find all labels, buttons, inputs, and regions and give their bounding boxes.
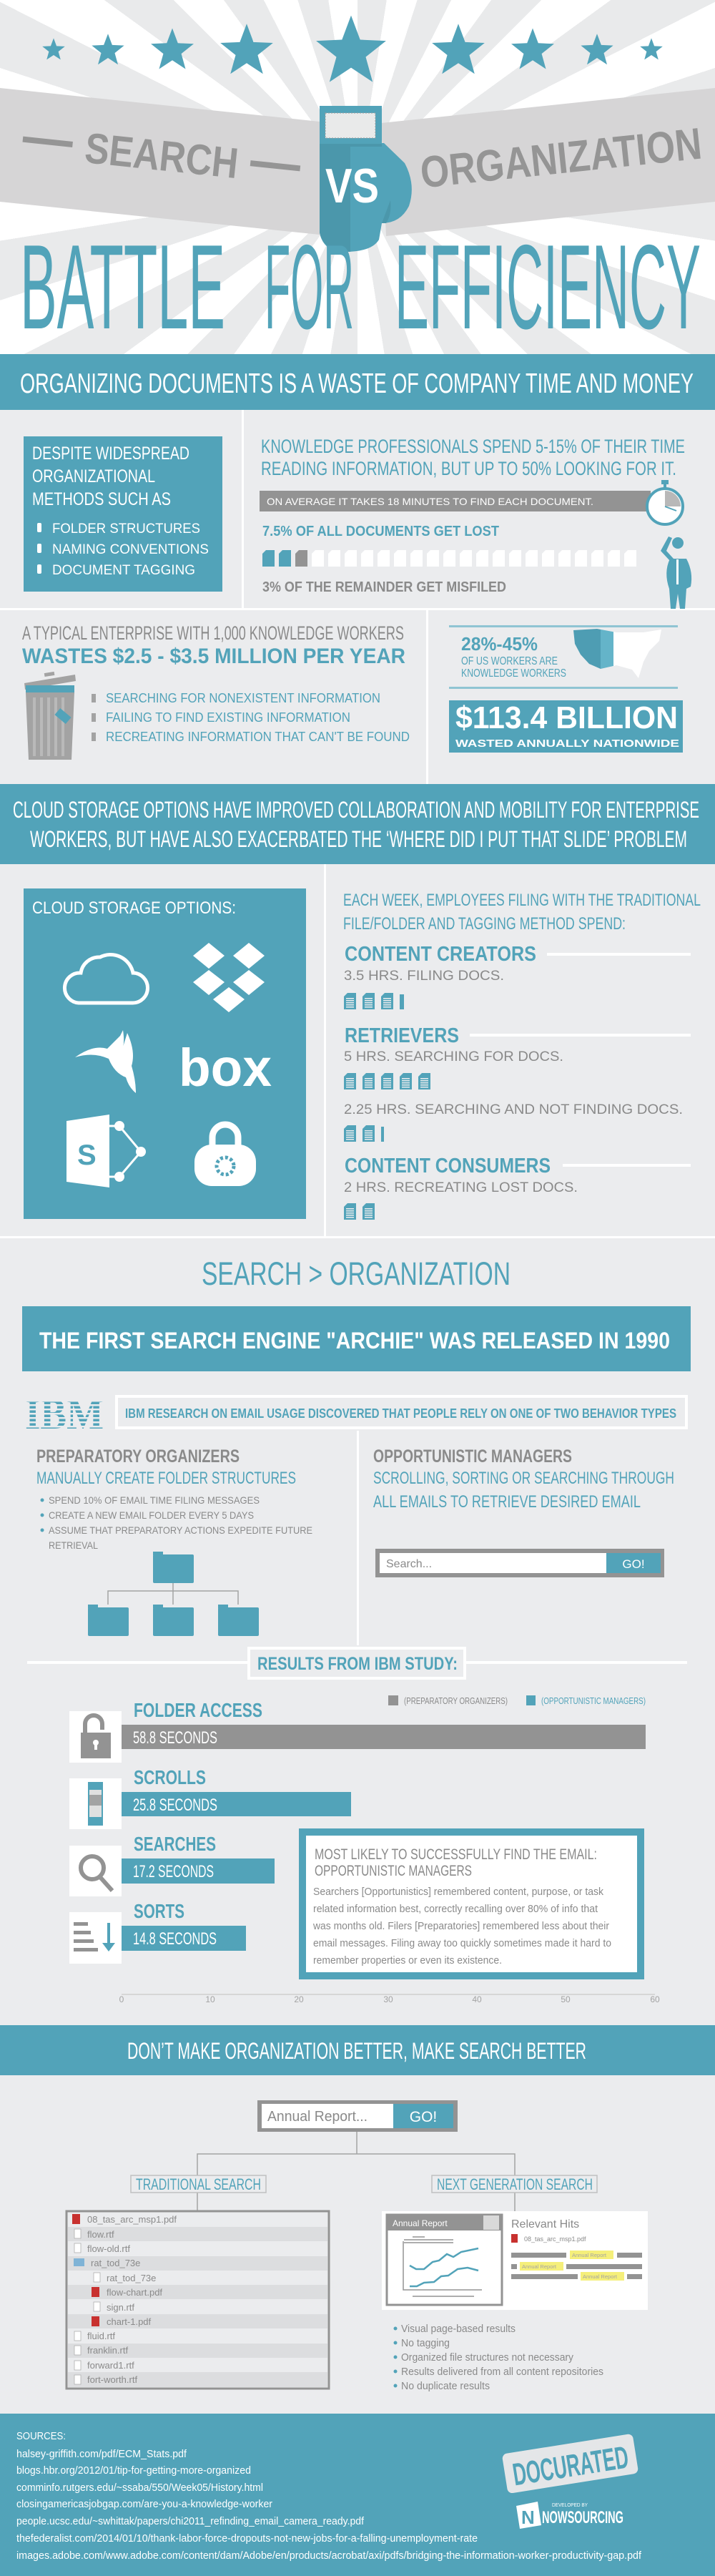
chart axis: 50	[561, 1994, 571, 2004]
icon: box logo: box	[179, 1038, 272, 1097]
callout: most likely to find email: email messages. Filing away too quickly sometimes made it hard to	[313, 1937, 611, 1949]
file list: traditional search results: forward1.rtf	[87, 2360, 134, 2371]
stat bar: 18 minutes	[260, 491, 651, 511]
column: preparatory organizers: PREPARATORY ORGANIZERS	[36, 1446, 240, 1466]
bar: searches: 17.2 SECONDS	[133, 1862, 214, 1881]
icon: trash can	[24, 672, 76, 760]
file list: traditional search results: flow.rtf	[87, 2229, 114, 2240]
column: preparatory organizers: CREATE A NEW EMAIL FOLDER EVERY 5 DAYS	[49, 1509, 254, 1521]
text block: knowledge professionals	[261, 436, 685, 479]
icon: lock	[194, 1125, 256, 1186]
bar: scrolls: SCROLLS	[134, 1766, 206, 1788]
legend	[388, 1695, 646, 1706]
bar: searches: SEARCHES	[134, 1833, 216, 1855]
legend: (PREPARATORY ORGANIZERS)	[404, 1695, 508, 1706]
chart axis: 10	[205, 1994, 215, 2004]
list: next generation benefits: Visual page-based results	[401, 2323, 516, 2335]
stat: knowledge workers with map: 28%-45%	[461, 633, 538, 655]
bar: scrolls	[69, 1766, 351, 1829]
banner: make search better	[0, 2025, 715, 2075]
heading: search > organization: SEARCH > ORGANIZATION	[202, 1255, 511, 1292]
panel: organizational methods: METHODS SUCH AS	[32, 489, 171, 509]
stat: content creators	[344, 943, 691, 1009]
panel: next generation results: 08_tas_arc_msp1.pdf	[524, 2235, 586, 2243]
panel: next generation results: Annual Report	[583, 2273, 618, 2280]
logo: nowsourcing	[516, 2502, 623, 2529]
search box: Search...	[386, 1558, 432, 1570]
chart axis: 0	[119, 1994, 124, 2004]
label: traditional search: TRADITIONAL SEARCH	[136, 2175, 261, 2193]
panel: next generation results: Annual Report	[522, 2263, 557, 2270]
column: preparatory organizers: MANUALLY CREATE FOLDER STRUCTURES	[36, 1469, 296, 1488]
banner: archie	[22, 1306, 691, 1371]
heading: SEARCH: SEARCH	[83, 124, 240, 187]
legend: (OPPORTUNISTIC MANAGERS)	[541, 1695, 646, 1706]
column: preparatory organizers: SPEND 10% OF EMAIL TIME FILING MESSAGES	[49, 1494, 260, 1506]
logo: docurated stamp	[502, 2434, 638, 2494]
search box: annual report	[257, 2100, 458, 2132]
file list: traditional search results: fort-worth.rtf	[87, 2374, 137, 2385]
icon: sharepoint: S	[77, 1140, 97, 1171]
list: next generation benefits	[393, 2323, 603, 2392]
file list: traditional search results	[66, 2211, 329, 2389]
stat: knowledge workers with map	[449, 625, 678, 689]
callout: most likely to find email: OPPORTUNISTIC MANAGERS	[315, 1863, 472, 1879]
sources list: thefederalist.com/2014/01/10/thank-labor-force-dropouts-not-new-jobs-for-a-falling-unemployment-rate	[16, 2532, 478, 2545]
heading: results from IBM study	[27, 1648, 687, 1678]
stat: knowledge workers with map: KNOWLEDGE WORKERS	[461, 667, 566, 680]
bar: sorts	[69, 1900, 246, 1964]
list: next generation benefits: No duplicate results	[401, 2380, 490, 2392]
callout: most likely to find email: was months old. Filers [Preparatories] remembered less about their	[312, 1920, 609, 1932]
list: wasted time causes: SEARCHING FOR NONEXISTENT INFORMATION	[106, 691, 380, 705]
search box: annual report: GO!	[410, 2109, 437, 2125]
panel: cloud storage options: CLOUD STORAGE OPTIONS:	[32, 898, 236, 918]
logo: docurated stamp: DOCURATED	[511, 2439, 631, 2492]
chart axis: 40	[472, 1994, 482, 2004]
banner: organizing documents	[0, 354, 715, 410]
stat: content consumers: CONTENT CONSUMERS	[345, 1155, 551, 1177]
bar: folder access: 58.8 SECONDS	[133, 1728, 217, 1748]
list: next generation benefits: Organized file structures not necessary	[401, 2351, 573, 2364]
sources list: blogs.hbr.org/2012/01/tip-for-getting-more-organized	[16, 2464, 251, 2477]
stat: retrievers: RETRIEVERS	[345, 1024, 459, 1047]
panel: next generation results	[382, 2211, 648, 2310]
callout: most likely to find email: related information best, correctly recalling over 80% of info that	[313, 1903, 598, 1915]
sources list: people.ucsc.edu/~swhittak/papers/chi2011_refinding_email_camera_ready.pdf	[16, 2515, 365, 2527]
text block: typical enterprise	[22, 622, 405, 668]
sources list: SOURCES:	[16, 2430, 66, 2442]
file list: traditional search results: franklin.rtf	[87, 2345, 128, 2356]
panel: organizational methods: NAMING CONVENTIONS	[52, 542, 209, 557]
file list: traditional search results: rat_tod_73e	[91, 2258, 140, 2268]
text: 3% misfiled: 3% OF THE REMAINDER GET MISFILED	[262, 579, 506, 595]
panel: organizational methods: FOLDER STRUCTURES	[52, 521, 200, 537]
stat: content consumers	[344, 1155, 691, 1220]
stat: content consumers: 2 HRS. RECREATING LOST DOCS.	[344, 1180, 578, 1195]
panel: cloud storage options	[24, 888, 306, 1219]
callout: most likely to find email	[302, 1832, 641, 1976]
file list: traditional search results: flow-old.rtf	[87, 2243, 130, 2254]
icon: dropbox	[193, 943, 265, 1012]
title: BATTLE FOR EFFICIENCY	[20, 220, 701, 354]
label: next generation search: NEXT GENERATION SEARCH	[437, 2175, 593, 2193]
stat: retrievers	[344, 1024, 691, 1142]
stat: retrievers: 2.25 HRS. SEARCHING AND NOT FINDING DOCS.	[344, 1102, 683, 1117]
heading: SEARCH	[20, 117, 302, 194]
icon: sharepoint	[66, 1115, 146, 1187]
file list: traditional search results: fluid.rtf	[87, 2331, 115, 2341]
sources list: images.adobe.com/www.adobe.com/content/dam/Adobe/en/products/acrobat/axi/pdfs/bridging-the-information-worker-productivity-gap.pdf	[16, 2550, 642, 2562]
bar: sorts: 14.8 SECONDS	[133, 1929, 217, 1949]
panel: organizational methods: DOCUMENT TAGGING	[52, 563, 195, 578]
list: next generation benefits: No tagging	[401, 2337, 450, 2349]
icon: stopwatch	[647, 480, 683, 524]
stat: content creators: 3.5 HRS. FILING DOCS.	[344, 969, 504, 984]
text: 7.5% lost: 7.5% OF ALL DOCUMENTS GET LOST	[262, 524, 499, 539]
callout: most likely to find email: Searchers [Opportunistics] remembered content, purpose, or task	[313, 1886, 603, 1898]
file list: traditional search results: rat_tod_73e	[107, 2273, 156, 2283]
stars row	[42, 16, 663, 82]
diagram: folder tree	[88, 1552, 259, 1636]
bar: scrolls: 25.8 SECONDS	[133, 1796, 217, 1815]
icon: hummingbird	[75, 1030, 136, 1093]
column: preparatory organizers: RETRIEVAL	[49, 1539, 98, 1551]
logo: nowsourcing: N	[521, 2507, 535, 2528]
panel: next generation results: Annual Report	[393, 2218, 448, 2228]
bar: searches	[69, 1833, 275, 1896]
sources list	[16, 2430, 642, 2562]
icon: boxing glove with VS: VS	[325, 159, 379, 213]
bar: sorts: SORTS	[134, 1900, 184, 1922]
search box: annual report: Annual Report...	[267, 2109, 368, 2125]
logo: IBM: IBM	[25, 1391, 104, 1438]
icon: boxing glove with VS	[320, 106, 412, 252]
callout: most likely to find email: remember properties or even its existence.	[313, 1954, 502, 1967]
title: BATTLE FOR EFFICIENCY: FOR	[265, 220, 354, 354]
chart axis: 20	[294, 1994, 304, 2004]
callout: most likely to find email: MOST LIKELY TO SUCCESSFULLY FIND THE EMAIL:	[315, 1846, 597, 1863]
chart axis: 30	[383, 1994, 393, 2004]
column: preparatory organizers: ASSUME THAT PREPARATORY ACTIONS EXPEDITE FUTURE	[49, 1524, 312, 1536]
header ray background	[0, 0, 715, 354]
stat: content creators: CONTENT CREATORS	[345, 943, 536, 966]
list: wasted time causes: FAILING TO FIND EXISTING INFORMATION	[106, 710, 350, 725]
stat: knowledge workers with map: OF US WORKERS ARE	[461, 655, 558, 667]
panel: next generation results: Annual Report	[572, 2252, 607, 2258]
logo: nowsourcing: DEVELOPED BY	[552, 2503, 588, 2508]
panel: organizational methods	[24, 436, 222, 592]
search box	[375, 1549, 664, 1577]
text block: each week: FILE/FOLDER AND TAGGING METHOD SPEND:	[343, 914, 626, 934]
stat bar: 18 minutes: ON AVERAGE IT TAKES 18 MINUTES TO FIND EACH DOCUMENT.	[267, 496, 593, 507]
chart: documents lost icons	[262, 550, 636, 567]
chart axis: 60	[650, 1994, 660, 2004]
file list: traditional search results: flow-chart.pdf	[107, 2287, 162, 2298]
text block: typical enterprise: WASTES $2.5 - $3.5 MILLION PER YEAR	[22, 645, 405, 668]
column: preparatory organizers	[36, 1446, 312, 1551]
text block: typical enterprise: A TYPICAL ENTERPRISE WITH 1,000 KNOWLEDGE WORKERS	[22, 622, 404, 644]
column: opportunistic managers	[373, 1446, 674, 1512]
panel: organizational methods: ORGANIZATIONAL	[32, 466, 155, 486]
logo: nowsourcing: NOWSOURCING	[542, 2508, 623, 2527]
panel: next generation results: Relevant Hits	[511, 2218, 579, 2230]
panel: organizational methods: DESPITE WIDESPREAD	[32, 444, 189, 464]
list: wasted time causes	[92, 691, 410, 744]
list: next generation benefits: Results delivered from all content repositories	[401, 2366, 603, 2378]
sources list: closingamericasjobgap.com/are-you-a-knowledge-worker	[16, 2498, 272, 2510]
file list: traditional search results: chart-1.pdf	[107, 2316, 152, 2327]
file list: traditional search results: sign.rtf	[107, 2302, 134, 2313]
heading: results from IBM study: RESULTS FROM IBM STUDY:	[257, 1654, 458, 1674]
icon: confused man	[661, 537, 691, 609]
file list: traditional search results: 08_tas_arc_msp1.pdf	[87, 2214, 177, 2225]
text block: each week	[343, 891, 701, 934]
title: BATTLE FOR EFFICIENCY: BATTLE	[20, 220, 225, 354]
sources list: halsey-griffith.com/pdf/ECM_Stats.pdf	[16, 2448, 187, 2460]
bar: folder access	[69, 1699, 646, 1763]
sources list: comminfo.rutgers.edu/~ssaba/550/Week05/History.html	[16, 2482, 263, 2494]
stat: retrievers: 5 HRS. SEARCHING FOR DOCS.	[344, 1049, 563, 1064]
icon: cloud	[64, 954, 148, 1003]
stat box: $113.4 billion: $113.4 BILLION	[455, 700, 678, 735]
column: opportunistic managers: OPPORTUNISTIC MANAGERS	[373, 1446, 572, 1466]
footer	[0, 2414, 715, 2576]
list: wasted time causes: RECREATING INFORMATION THAT CAN'T BE FOUND	[106, 730, 410, 744]
chart axis	[119, 1994, 660, 2004]
callout: IBM research	[117, 1396, 686, 1428]
banner: cloud storage	[0, 784, 715, 864]
bar: folder access: FOLDER ACCESS	[134, 1699, 262, 1721]
search box: GO!	[622, 1557, 645, 1571]
stat box: $113.4 billion: WASTED ANNUALLY NATIONWIDE	[455, 738, 679, 750]
stat box: $113.4 billion	[449, 700, 683, 753]
gray banner ribbon	[0, 88, 715, 236]
